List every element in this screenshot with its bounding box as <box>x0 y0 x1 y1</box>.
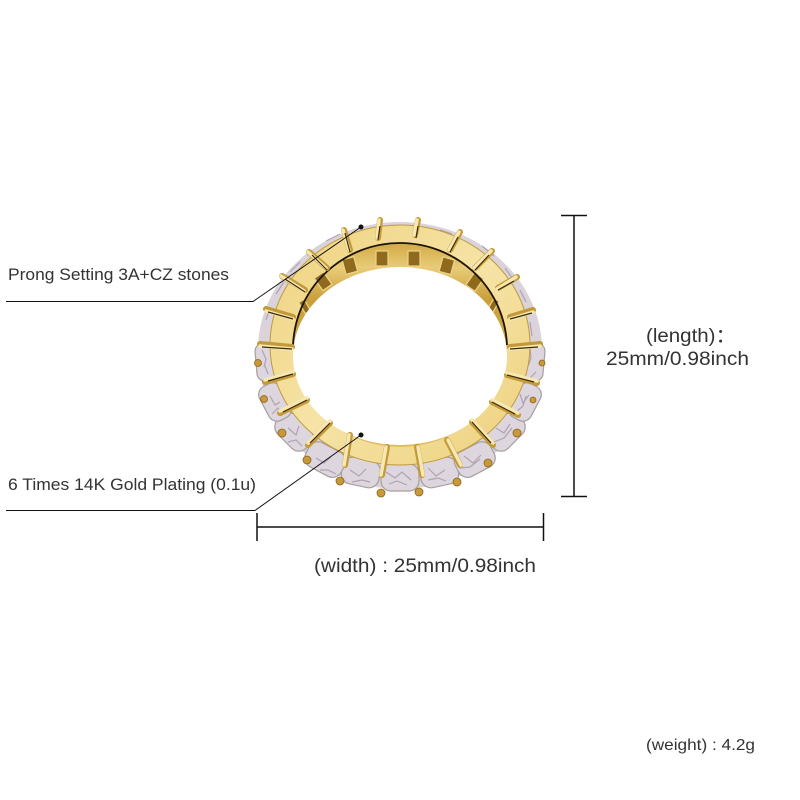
prong dark lines <box>262 226 538 443</box>
prong highlights <box>260 220 540 475</box>
width label: (width) : 25mm/0.98inch <box>314 556 536 577</box>
ring <box>254 220 546 497</box>
length dimension arrow <box>561 216 587 496</box>
prong balls <box>254 360 545 497</box>
inner wall <box>293 243 507 447</box>
callout dot <box>358 224 364 230</box>
stone texture <box>262 230 536 485</box>
callout dot <box>358 432 364 438</box>
top edge shadow line <box>293 243 507 345</box>
callout line <box>6 227 361 302</box>
width dimension arrow <box>257 513 544 541</box>
inner wall slots <box>299 251 499 314</box>
length label <box>606 326 749 370</box>
length label: 25mm/0.98inch <box>606 349 749 370</box>
lower stones <box>254 342 546 491</box>
center hole <box>293 267 507 445</box>
gold band face <box>270 225 530 465</box>
weight label: (weight) : 4.2g <box>646 737 755 754</box>
callout text: 6 Times 14K Gold Plating (0.1u) <box>8 475 256 494</box>
callout line <box>6 435 361 510</box>
stones base band <box>258 222 542 489</box>
callout: prong setting <box>6 224 364 302</box>
prongs <box>260 220 540 475</box>
length label: (length)： <box>646 326 736 347</box>
callout text: Prong Setting 3A+CZ stones <box>8 265 229 284</box>
callout: gold plating <box>6 432 364 510</box>
